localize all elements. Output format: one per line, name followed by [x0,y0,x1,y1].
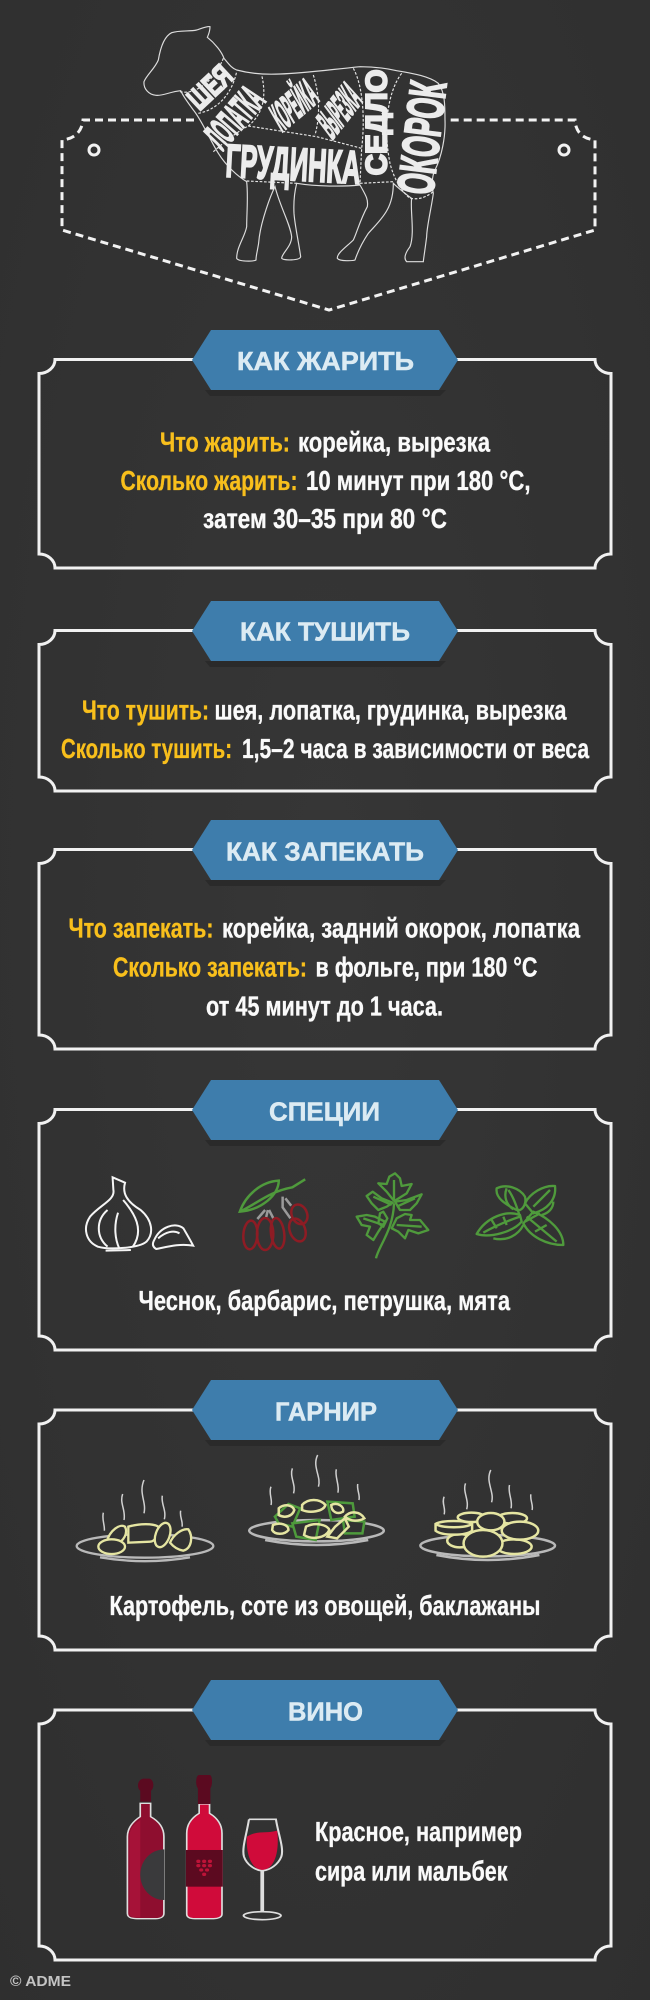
ribbon heading: СПЕЦИИ [269,1096,380,1126]
wine caption: сира или мальбек [315,1856,508,1886]
panel: как запекать [39,820,611,1049]
body text [61,694,589,764]
ribbon heading: КАК ЖАРИТЬ [237,346,414,376]
icon: wine glass [243,1819,282,1920]
cut label: шея: ШЕЯ [181,59,239,116]
body text [68,912,580,1022]
cut dividers [180,58,433,199]
icon: red wine bottle [186,1775,223,1919]
icon: dark wine bottle [127,1779,164,1919]
panel: как жарить [39,330,611,568]
icon: mint [477,1186,563,1245]
panel: как тушить [39,601,611,791]
ribbon heading [192,1680,458,1746]
ribbon heading [192,1380,458,1446]
icon: parsley [357,1173,428,1258]
body text: Сколько тушить: [61,733,232,764]
panel: специи [39,1080,611,1350]
panel frame [39,1710,611,1960]
copyright: © ADME [10,1973,71,1990]
ribbon heading [192,820,458,886]
header dashed banner [62,120,595,310]
cut label: седло: СЕДЛО [361,69,394,175]
ribbon heading: ВИНО [288,1696,363,1726]
body text: Что запекать: [68,912,214,944]
icon: potato plate [77,1480,213,1561]
body text: в фольге, при 180 °C [316,952,538,982]
sheep butchery diagram [144,27,457,262]
spices caption: Чеснок, барбарис, петрушка, мята [138,1285,510,1316]
ribbon heading [192,1080,458,1146]
body text: Что жарить: [160,426,290,458]
ribbon heading [192,330,458,396]
panel: вино [39,1680,611,1960]
sheep body fill [144,27,445,262]
panel: гарнир [39,1380,611,1650]
body text [120,426,530,534]
panel frame [39,850,611,1049]
panel frame [39,360,611,568]
ribbon heading: КАК ТУШИТЬ [240,616,410,646]
body text: Что тушить: [82,694,209,726]
body text: затем 30–35 при 80 °C [203,503,447,534]
panel frame [39,1410,611,1650]
panel frame [39,1110,611,1350]
ribbon heading [192,601,458,667]
body text: от 45 минут до 1 часа. [206,990,443,1022]
icon: garlic [86,1177,193,1251]
body text: корейка, вырезка [298,426,490,458]
body text: Сколько жарить: [120,465,298,496]
icon: vegetable saute plate [249,1455,384,1545]
wine caption [315,1816,522,1886]
body text: Сколько запекать: [113,952,307,982]
cut label: грудинка: ГРУДИНКА [224,135,362,194]
panel frame [39,630,611,791]
wine caption: Красное, например [315,1816,522,1847]
body text: 10 минут при 180 °C, [306,465,530,496]
ribbon heading: ГАРНИР [275,1396,377,1426]
ribbon heading: КАК ЗАПЕКАТЬ [226,836,424,866]
icon: eggplant plate [420,1470,555,1560]
icon: barberry [240,1179,310,1250]
